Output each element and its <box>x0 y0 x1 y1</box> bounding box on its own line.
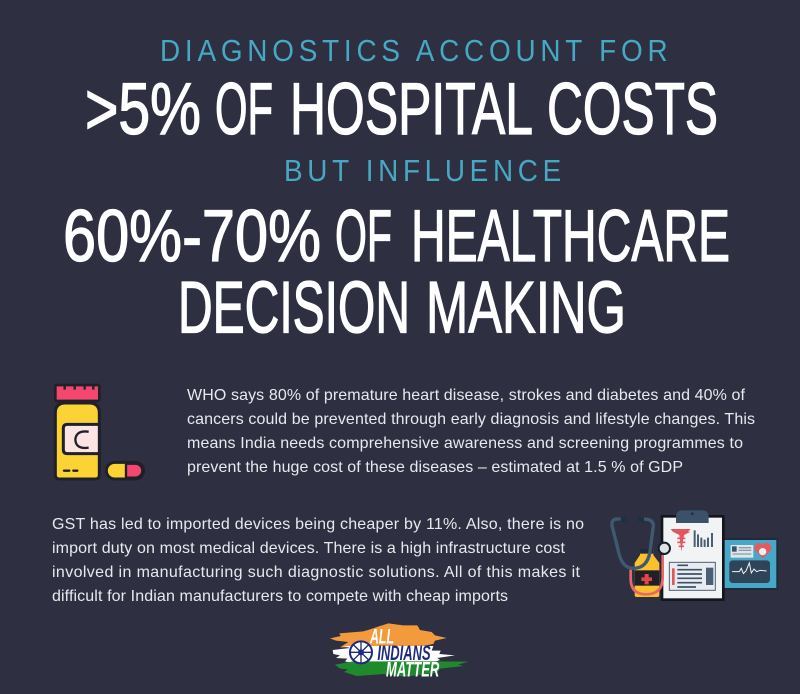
headline: 60%-70% of healthcare: OF <box>335 196 392 277</box>
headline: over 5% of hospital costs: COSTS <box>547 69 718 150</box>
paragraph: WHO prevention statistics: means India needs comprehensive awareness and screening programmes to <box>187 435 743 452</box>
logo brush: white band <box>333 646 455 663</box>
logo words: INDIANS <box>377 640 431 665</box>
logo brush: saffron band <box>330 623 447 647</box>
logo words <box>369 623 440 682</box>
headline: decision making: MAKING <box>426 268 626 348</box>
subheading: but influence: BUT INFLUENCE <box>284 154 561 188</box>
logo words: MATTER <box>386 657 440 682</box>
headline: over 5% of hospital costs: HOSPITAL <box>290 69 533 150</box>
paragraph: WHO prevention statistics <box>187 387 755 476</box>
headline: 60%-70% of healthcare <box>63 196 730 277</box>
paragraph: WHO prevention statistics: cancers could be prevented through early diagnosis and lifestyle changes. This <box>187 411 755 428</box>
icon: medicine bottle and pill <box>55 385 144 479</box>
paragraph: GST and imports: GST has led to imported devices being cheaper by 11%. Also, there is no <box>52 516 584 533</box>
headline: decision making: DECISION <box>178 268 410 348</box>
icon: stethoscope, clipboard and monitor <box>612 510 777 600</box>
headline: over 5% of hospital costs: >5% <box>85 69 201 150</box>
paragraph: WHO prevention statistics: prevent the huge cost of these diseases – estimated at 1.5 % of GDP <box>187 459 683 476</box>
logo: All Indians Matter <box>330 623 468 682</box>
paragraph: GST and imports: difficult for Indian manufacturers to compete with cheap imports <box>52 588 508 605</box>
paragraph: GST and imports <box>52 516 584 605</box>
logo chakra wheel <box>350 641 372 663</box>
headline: over 5% of hospital costs <box>85 69 718 150</box>
logo words: ALL <box>369 623 394 648</box>
subheading: diagnostics account for: DIAGNOSTICS ACCOUNT FOR <box>160 34 668 68</box>
headline: 60%-70% of healthcare: 60%-70% <box>63 196 321 277</box>
logo brush: green band <box>335 661 468 677</box>
headline: over 5% of hospital costs: OF <box>215 69 273 150</box>
paragraph: GST and imports: involved in manufacturing such diagnostic solutions. All of this makes it <box>52 564 581 581</box>
paragraph: WHO prevention statistics: WHO says 80% of premature heart disease, strokes and diabetes and 40% of <box>187 387 746 404</box>
heading block <box>63 34 730 349</box>
paragraph: GST and imports: import duty on most medical devices. There is a high infrastructure cost <box>52 540 566 557</box>
